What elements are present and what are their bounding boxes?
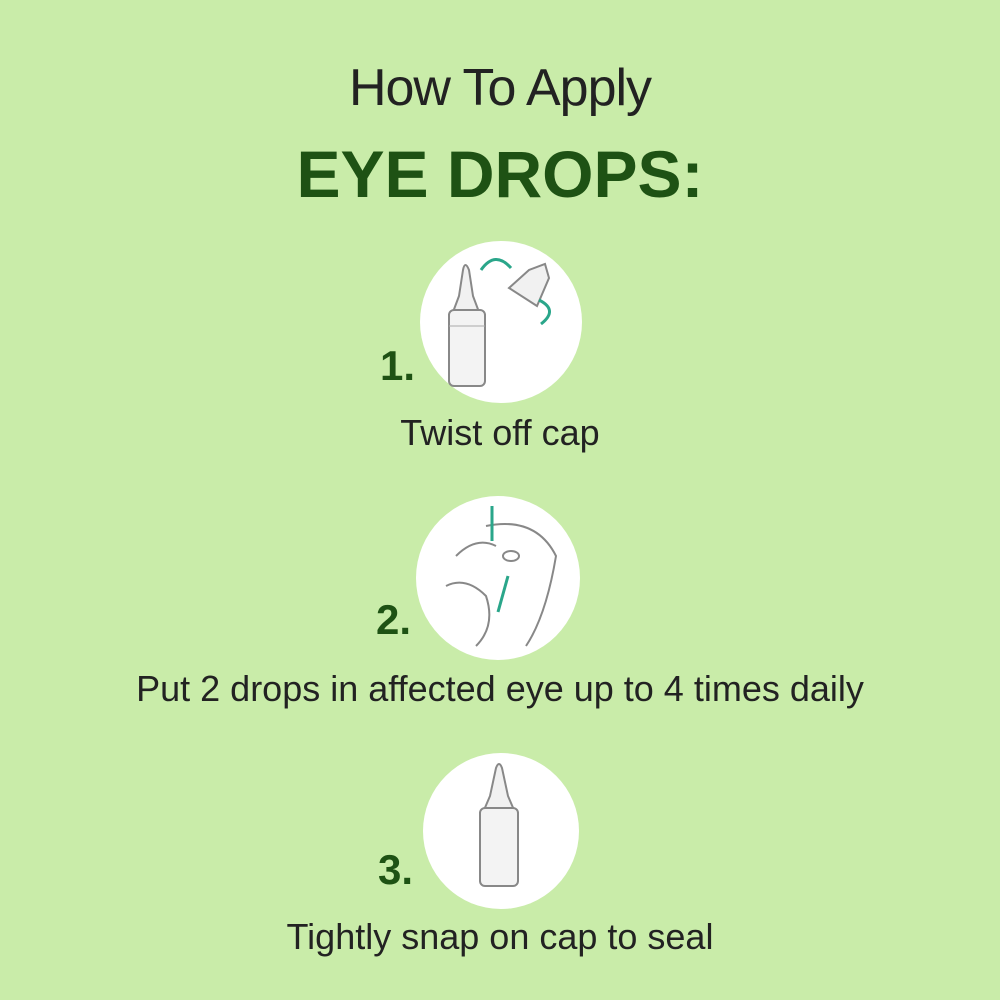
icon: face applying drops [416,496,580,660]
step 3 [287,753,713,957]
heading: eye drops: EYE DROPS: [296,137,704,211]
icon: capped bottle [423,753,579,909]
number 1: 1. [380,342,415,389]
number 3: 3. [378,846,413,893]
step 1 [380,241,600,453]
caption 1: Twist off cap [400,412,600,453]
number 2: 2. [376,596,411,643]
caption 2: Put 2 drops in affected eye up to 4 times daily [136,668,864,709]
caption 3: Tightly snap on cap to seal [287,916,713,957]
step 2 [136,496,864,709]
icon: bottle twist cap [420,241,582,403]
title: How To Apply [349,59,651,117]
